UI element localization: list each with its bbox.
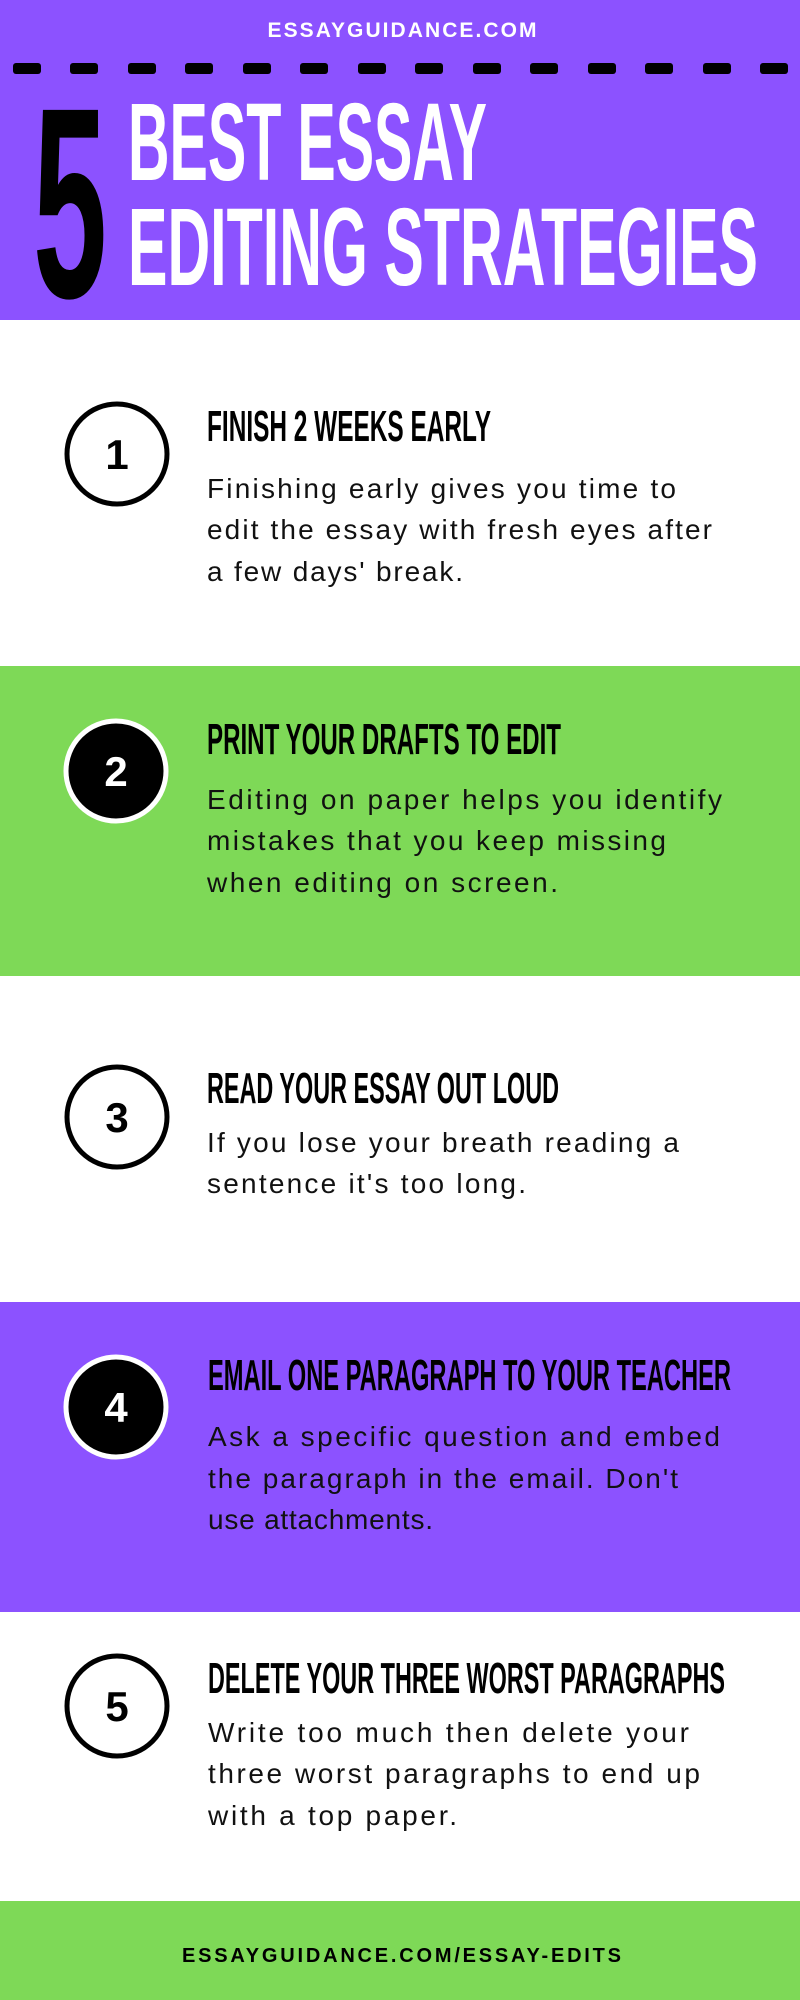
panel: strategy 4: the paragraph in the email. Don't: [208, 1463, 678, 1494]
panel: strategy 2: Editing on paper helps you identify: [207, 784, 722, 815]
panel: strategy 3: If you lose your breath reading a: [207, 1127, 679, 1158]
panel: strategy 5: three worst paragraphs to end up: [208, 1758, 700, 1789]
footer: [0, 1901, 800, 2000]
panel: strategy 3: 3: [105, 1094, 129, 1141]
panel: strategy 4: Ask a specific question and embed: [208, 1421, 720, 1452]
panel: strategy 3: [0, 976, 800, 1302]
panel: strategy 1: a few days' break.: [207, 556, 463, 587]
panel: strategy 1: 1: [105, 431, 129, 478]
panel: strategy 1: FINISH 2 WEEKS EARLY: [207, 402, 491, 451]
panel: strategy 5: [0, 1612, 800, 1901]
header banner: [0, 0, 800, 355]
site name: ESSAYGUIDANCE.COM: [268, 19, 536, 42]
panel: strategy 2: mistakes that you keep missing: [207, 825, 666, 856]
panel: strategy 2: [0, 666, 800, 976]
panel: strategy 5: Write too much then delete your: [208, 1717, 689, 1748]
header banner: 5: [33, 51, 107, 355]
panel: strategy 4: 4: [104, 1384, 128, 1431]
panel: strategy 1: Finishing early gives you time to: [207, 473, 676, 504]
title: BEST ESSAY: [128, 81, 487, 204]
panel: strategy 2: when editing on screen.: [206, 867, 558, 898]
panel: strategy 1: [0, 320, 800, 666]
panel: strategy 5: with a top paper.: [207, 1800, 457, 1831]
panel: strategy 3: sentence it's too long.: [207, 1168, 526, 1199]
panel: strategy 2: 2: [104, 748, 128, 795]
panel: strategy 4: [0, 1302, 800, 1612]
panel: strategy 5: 5: [105, 1683, 129, 1730]
panel: strategy 1: edit the essay with fresh eyes after: [207, 514, 712, 545]
title: [128, 81, 758, 309]
footer: ESSAYGUIDANCE.COM/ESSAY-EDITS: [182, 1945, 621, 1967]
panel: strategy 4: use attachments.: [208, 1504, 433, 1535]
